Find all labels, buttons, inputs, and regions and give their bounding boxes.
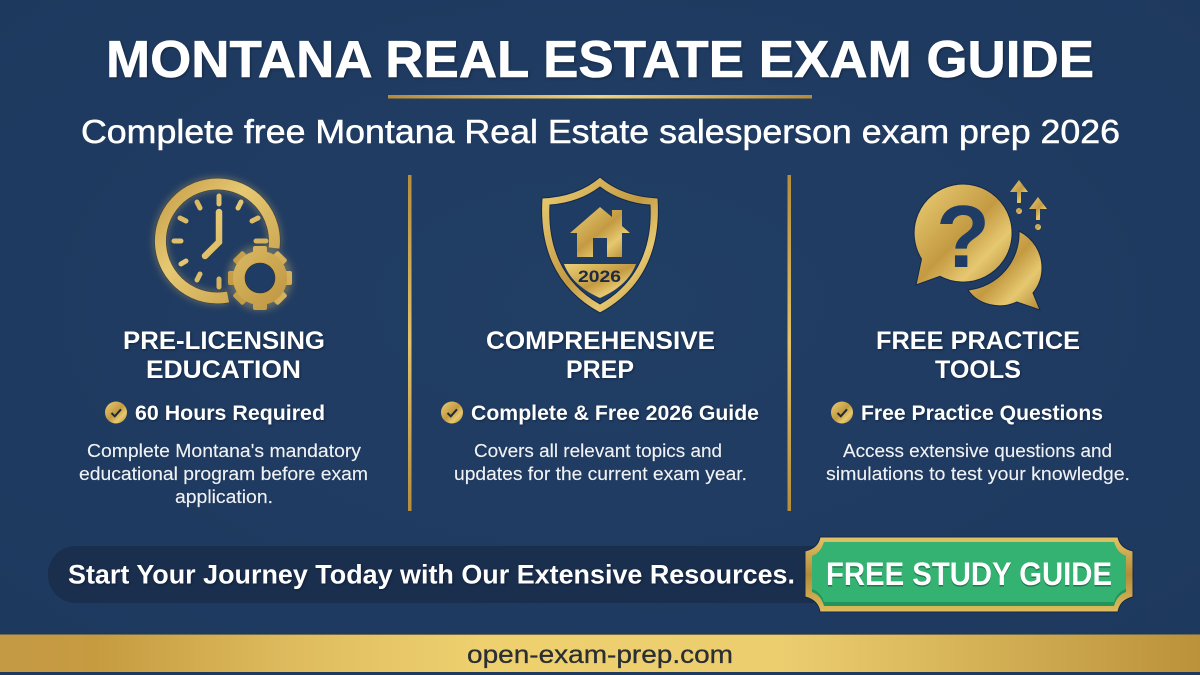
icon: question speech bubbles: ? [936, 187, 990, 286]
description: application. [175, 487, 273, 507]
divider left [408, 175, 412, 511]
icon: question speech bubbles [914, 180, 1047, 310]
icon: clock with gear [160, 184, 292, 310]
icon: check badge [105, 402, 127, 424]
heading [123, 327, 325, 384]
button: free study guide: FREE STUDY GUIDE [826, 556, 1112, 592]
icon: shield with house [542, 177, 658, 313]
call to action bar [48, 546, 838, 603]
subtitle: Complete free Montana Real Estate salesperson exam prep 2026 [81, 114, 1120, 151]
icon: check badge [441, 402, 463, 424]
divider right [788, 175, 791, 511]
heading: EDUCATION [146, 356, 301, 384]
feature label: Free Practice Questions [861, 402, 1103, 425]
heading: PRE-LICENSING [123, 327, 325, 355]
panel: pre-licensing education [79, 184, 368, 507]
call to action bar: Start Your Journey Today with Our Extensive Resources. [68, 560, 795, 590]
description: Covers all relevant topics and [474, 441, 722, 461]
description: updates for the current exam year. [454, 464, 747, 484]
description: simulations to test your knowledge. [826, 464, 1130, 484]
heading [486, 327, 715, 384]
panel: free practice tools [826, 180, 1130, 484]
icon: shield with house: 2026 [578, 268, 621, 286]
icon: check badge [831, 402, 853, 424]
description: educational program before exam [79, 464, 368, 484]
button: free study guide [805, 537, 1133, 612]
heading [876, 327, 1080, 384]
description [79, 441, 368, 507]
button: free study guide: FREE STUDY GUIDE [826, 558, 1112, 594]
title: MONTANA REAL ESTATE EXAM GUIDE [106, 31, 1094, 89]
feature label: Complete & Free 2026 Guide [471, 402, 759, 425]
footer band: open-exam-prep.com [467, 641, 733, 669]
feature label: 60 Hours Required [135, 402, 325, 425]
heading: PREP [566, 356, 634, 384]
heading: COMPREHENSIVE [486, 327, 715, 355]
title underline [388, 95, 812, 98]
description: Access extensive questions and [843, 441, 1112, 461]
description [826, 441, 1130, 484]
heading: FREE PRACTICE [876, 327, 1080, 355]
panel: comprehensive prep [441, 177, 759, 484]
description: Complete Montana's mandatory [87, 441, 361, 461]
footer band [0, 634, 1200, 672]
heading: TOOLS [935, 356, 1021, 384]
description [454, 441, 747, 484]
